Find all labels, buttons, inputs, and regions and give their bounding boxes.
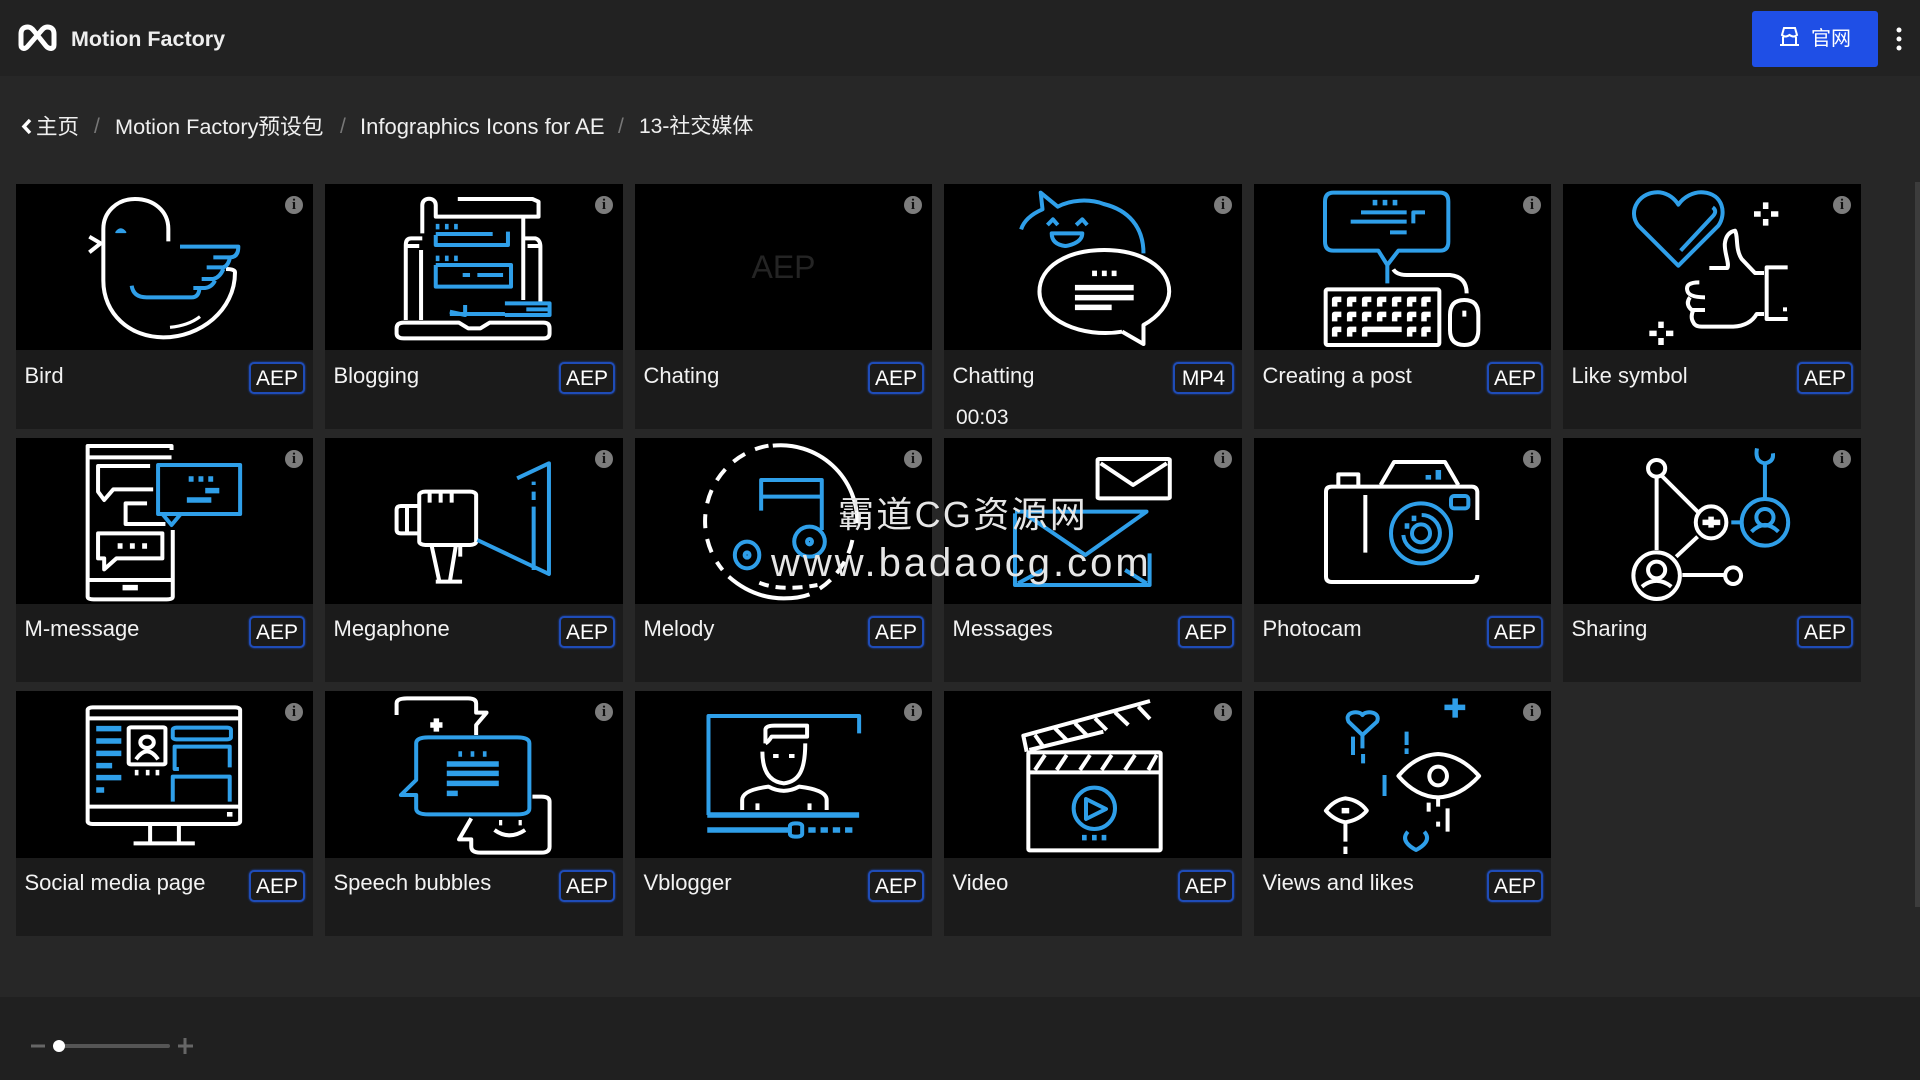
icon: blogging — [325, 184, 623, 350]
card title: Like symbol — [1572, 363, 1688, 388]
format badge — [1487, 870, 1543, 902]
card title: Social media page — [24, 870, 206, 895]
icon: chat bubbles — [944, 184, 1242, 350]
info icon: i — [1530, 451, 1534, 467]
icon: heart and thumbs up — [1563, 184, 1861, 350]
info icon — [904, 450, 922, 468]
info icon — [595, 196, 613, 214]
info icon — [1833, 196, 1851, 214]
info icon: i — [292, 451, 296, 467]
watermark line 1: 霸道CG资源网 — [838, 494, 1088, 535]
info icon — [1214, 703, 1232, 721]
icon: music note in circle — [635, 438, 932, 604]
info icon — [1833, 450, 1851, 468]
format badge — [1487, 362, 1543, 394]
info icon — [285, 703, 303, 721]
card title: Sharing — [1572, 616, 1647, 641]
panel: Like symbol card — [1563, 184, 1861, 429]
panel: Chating card — [635, 184, 932, 429]
scrollbar — [1915, 182, 1920, 907]
icon: mobile messages — [16, 438, 313, 604]
panel: Vblogger card — [635, 691, 932, 936]
info icon: i — [1221, 704, 1225, 720]
format badge: AEP — [1494, 621, 1536, 644]
info icon: i — [911, 704, 915, 720]
format badge: AEP — [875, 367, 917, 390]
format badge — [249, 870, 305, 902]
icon: megaphone — [325, 438, 623, 604]
card title: Bird — [24, 363, 64, 388]
icon: eyes and hearts — [1254, 691, 1551, 858]
panel: Speech bubbles card — [325, 691, 623, 936]
format badge — [249, 616, 305, 648]
icon: more menu — [1896, 28, 1902, 50]
info icon — [285, 450, 303, 468]
card title: Speech bubbles — [334, 870, 491, 895]
card title: Megaphone — [334, 616, 450, 641]
format badge — [1797, 616, 1853, 648]
format badge — [1797, 362, 1853, 394]
format badge — [249, 362, 305, 394]
info icon: i — [1530, 704, 1534, 720]
card title: Chating — [644, 363, 719, 388]
icon: speech bubbles — [325, 691, 623, 858]
icon: keyboard and post bubble — [1254, 184, 1551, 350]
separator: / — [94, 115, 100, 138]
info icon: i — [1221, 197, 1225, 213]
format badge — [868, 870, 924, 902]
info icon — [1523, 450, 1541, 468]
format badge: AEP — [875, 621, 917, 644]
thumbnail placeholder — [635, 184, 932, 350]
format badge: AEP — [256, 621, 298, 644]
format badge — [868, 616, 924, 648]
format badge: AEP — [1185, 875, 1227, 898]
format badge — [559, 616, 615, 648]
card title: Video — [952, 870, 1008, 895]
panel: Views and likes card — [1254, 691, 1551, 936]
icon: bird — [16, 184, 313, 350]
info icon: i — [1840, 197, 1844, 213]
info icon — [1523, 703, 1541, 721]
panel: M-message card — [16, 438, 313, 682]
format badge: AEP — [256, 875, 298, 898]
thumbnail placeholder: AEP — [751, 249, 816, 285]
format badge: AEP — [1494, 875, 1536, 898]
info icon: i — [292, 197, 296, 213]
separator: / — [340, 115, 346, 138]
format badge — [1178, 616, 1234, 648]
brand name: Motion Factory — [71, 27, 225, 51]
format badge: AEP — [566, 621, 608, 644]
card title: Creating a post — [1262, 363, 1412, 388]
format badge: AEP — [1185, 621, 1227, 644]
format badge: AEP — [566, 367, 608, 390]
zoom slider — [31, 1038, 193, 1054]
info icon — [904, 196, 922, 214]
info icon: i — [1840, 451, 1844, 467]
info icon: i — [1530, 197, 1534, 213]
panel: Bird card — [16, 184, 313, 429]
icon: camera — [1254, 438, 1551, 604]
format badge — [868, 362, 924, 394]
breadcrumb: current folder: 13-社交媒体 — [639, 115, 753, 138]
card title: Melody — [644, 616, 714, 641]
button: official site — [1752, 11, 1878, 67]
panel: Melody card — [635, 438, 932, 682]
panel: Messages card — [944, 438, 1242, 682]
watermark — [770, 494, 1152, 585]
breadcrumb: home: 主页 — [36, 115, 79, 139]
format badge: AEP — [256, 367, 298, 390]
format badge — [1487, 616, 1543, 648]
panel: Blogging card — [325, 184, 623, 429]
panel: Megaphone card — [325, 438, 623, 682]
info icon: i — [1221, 451, 1225, 467]
format badge: MP4 — [1182, 367, 1225, 390]
icon: envelopes — [944, 438, 1242, 604]
info icon — [1214, 196, 1232, 214]
watermark line 2: www.badaocg.com — [771, 541, 1152, 585]
format badge: AEP — [1804, 621, 1846, 644]
icon: store — [1780, 27, 1799, 46]
icon: share network — [1563, 438, 1861, 604]
header bar — [0, 0, 1920, 76]
panel: Video card — [944, 691, 1242, 936]
button label: 官网 — [1811, 28, 1851, 50]
bottom bar with zoom slider — [0, 997, 1920, 1080]
card title: Photocam — [1262, 616, 1362, 641]
breadcrumb: icons pack: Infographics Icons for AE — [360, 114, 605, 139]
info icon — [595, 703, 613, 721]
icon: clapperboard — [944, 691, 1242, 858]
card title: Blogging — [334, 363, 419, 388]
format badge — [559, 870, 615, 902]
panel: Sharing card — [1563, 438, 1861, 682]
format badge — [1178, 870, 1234, 902]
info icon — [904, 703, 922, 721]
icon: Motion Factory logo — [18, 24, 56, 51]
duration: 00:03 — [956, 406, 1009, 429]
icon: back chevron — [22, 118, 32, 134]
breadcrumb — [22, 114, 753, 139]
icon: video blogger — [635, 691, 932, 858]
card title: Views and likes — [1262, 870, 1414, 895]
panel: Chatting card — [944, 184, 1242, 429]
format badge: AEP — [1804, 367, 1846, 390]
info icon: i — [911, 451, 915, 467]
info icon — [595, 450, 613, 468]
format badge: AEP — [1494, 367, 1536, 390]
panel: Social media page card — [16, 691, 313, 936]
format badge: AEP — [875, 875, 917, 898]
format badge — [559, 362, 615, 394]
card title: M-message — [24, 616, 139, 641]
card title: Messages — [952, 616, 1053, 641]
info icon: i — [292, 704, 296, 720]
format badge — [1173, 362, 1234, 394]
icon: monitor with profile — [16, 691, 313, 858]
card title: Chatting — [952, 363, 1034, 388]
separator: / — [618, 115, 624, 138]
info icon: i — [602, 197, 606, 213]
info icon — [1523, 196, 1541, 214]
panel: Creating a post card — [1254, 184, 1551, 429]
info icon — [1214, 450, 1232, 468]
info icon: i — [602, 704, 606, 720]
info icon: i — [602, 451, 606, 467]
info icon — [285, 196, 303, 214]
card title: Vblogger — [644, 870, 732, 895]
info icon: i — [911, 197, 915, 213]
breadcrumb: preset pack: Motion Factory预设包 — [115, 114, 324, 139]
panel: Photocam card — [1254, 438, 1551, 682]
format badge: AEP — [566, 875, 608, 898]
